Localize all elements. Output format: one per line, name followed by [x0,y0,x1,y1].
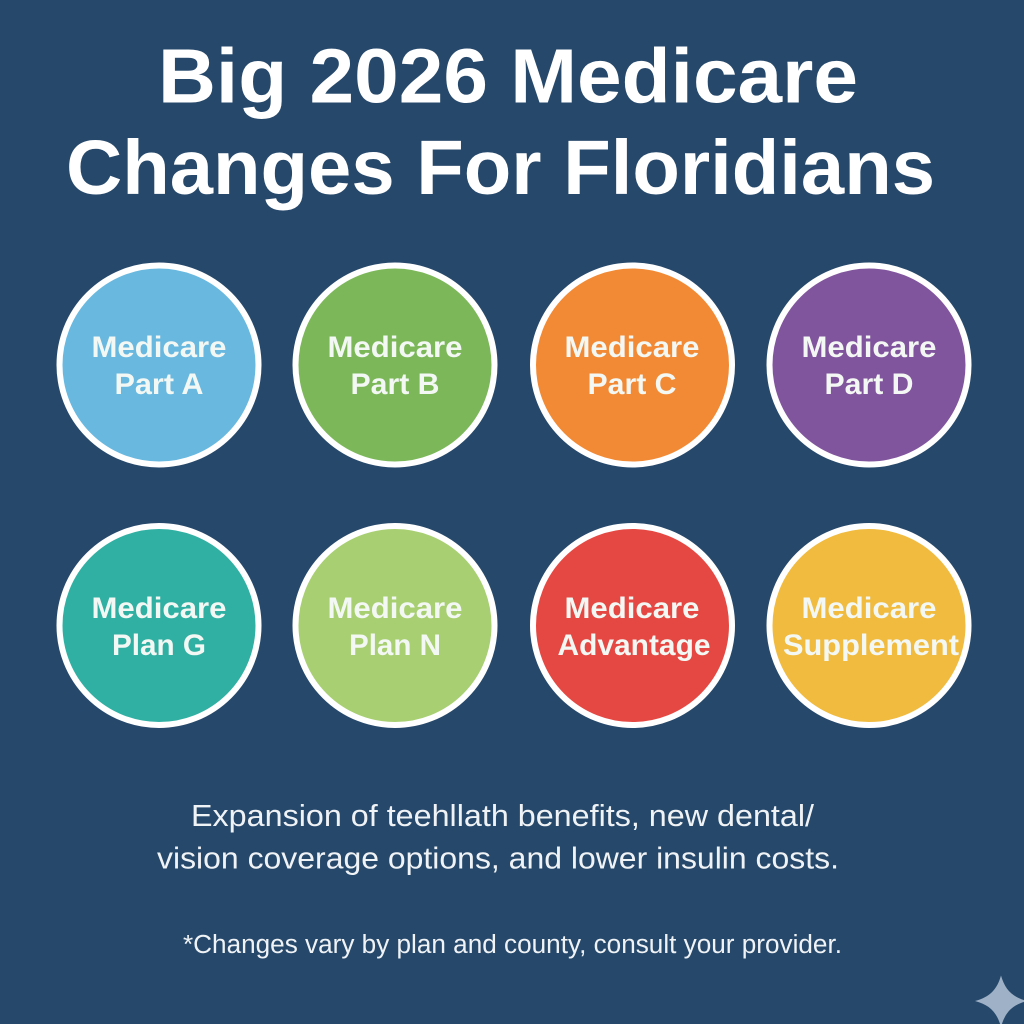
circle: Medicare Supplement: Supplement [783,629,959,662]
circle: Medicare Advantage [533,526,732,725]
circle: Medicare Part A [60,266,258,464]
circle: Medicare Plan G [60,526,258,725]
circle: Medicare Part C: Medicare [564,331,700,364]
title [66,34,935,211]
circle: Medicare Advantage: Advantage [558,629,710,662]
circle: Medicare Plan G: Plan G [112,629,206,662]
circle: Medicare Part D: Part D [824,368,914,401]
circle: Medicare Part B [296,266,494,464]
circle: Medicare Part B: Part B [350,368,440,401]
description text: Expansion of teehllath benefits, new dental/ [191,799,815,833]
circle: Medicare Part A: Part A [114,368,204,401]
circle: Medicare Advantage: Medicare [564,592,700,625]
circle: Medicare Plan N: Plan N [349,629,441,662]
icon: sparkle star [975,976,1024,1024]
circle: Medicare Plan G: Medicare [92,592,226,625]
title: Big 2026 Medicare [158,34,858,120]
footnote: *Changes vary by plan and county, consult your provider. [183,931,842,959]
circle: Medicare Part C [533,266,732,464]
circle: Medicare Plan N: Medicare [328,592,462,625]
circle: Medicare Supplement: Medicare [802,592,936,625]
description text: vision coverage options, and lower insulin costs. [157,842,839,876]
circle: Medicare Supplement [770,526,968,725]
description text [157,799,839,876]
circle: Medicare Part A: Medicare [92,331,226,364]
title: Changes For Floridians [66,125,935,211]
circle: Medicare Part D [770,266,968,464]
circle: Medicare Part D: Medicare [802,331,936,364]
circle: Medicare Part C: Part C [588,368,676,401]
circle: Medicare Part B: Medicare [328,331,462,364]
circle: Medicare Plan N [296,526,494,725]
